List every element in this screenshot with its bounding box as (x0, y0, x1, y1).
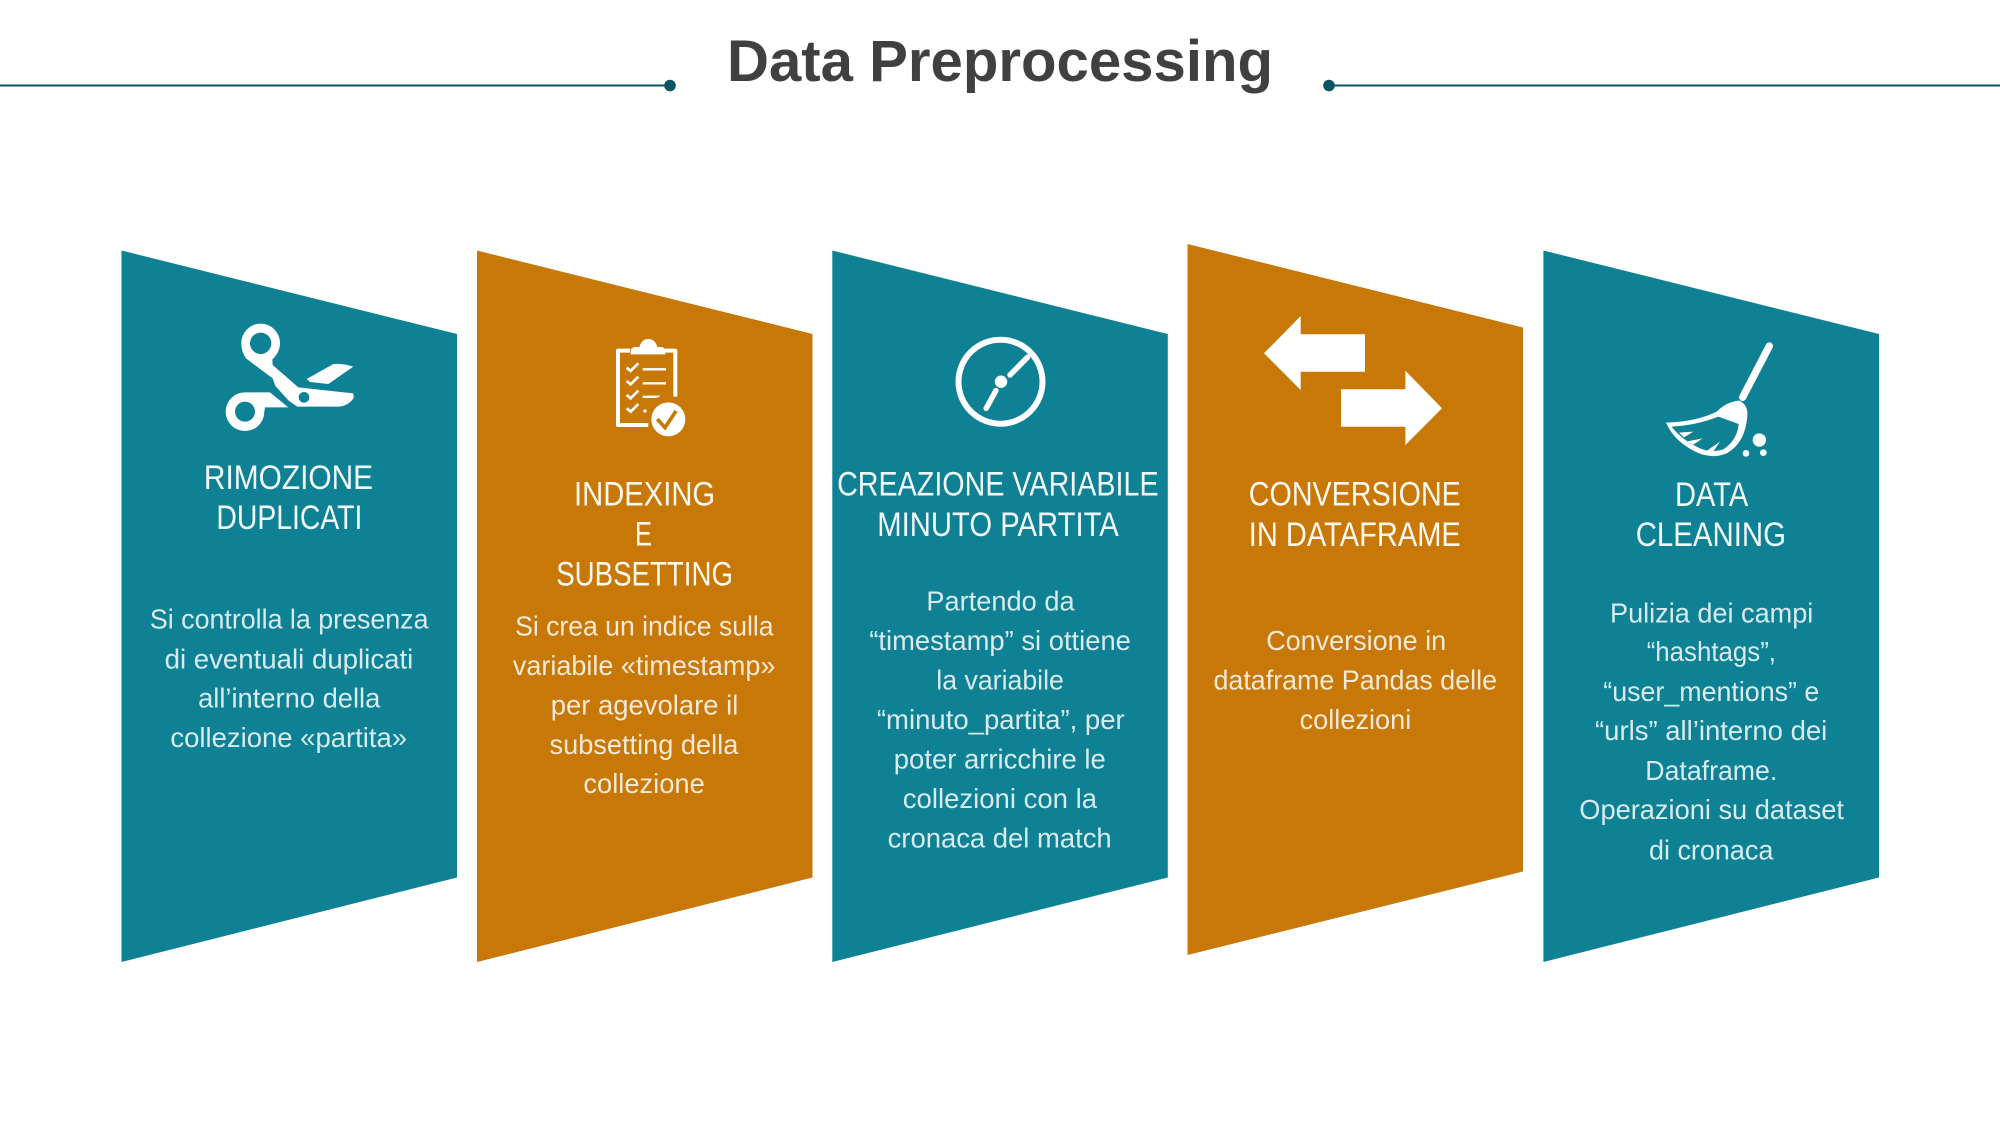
heading (837, 466, 1159, 544)
text block: “minuto_partita”, per (877, 704, 1125, 735)
text block (150, 604, 429, 753)
title rule: right (1323, 80, 2000, 91)
heading: IN DATAFRAME (1249, 516, 1461, 554)
panel: conversione in dataframe (1188, 244, 1523, 955)
heading (556, 476, 733, 594)
text block: Pulizia dei campi (1610, 597, 1813, 628)
text block: subsetting della (550, 729, 739, 760)
title: Data Preprocessing (727, 29, 1273, 94)
heading: CONVERSIONE (1249, 476, 1461, 514)
text block: Si crea un indice sulla (515, 611, 774, 642)
heading: CLEANING (1636, 516, 1786, 554)
icon: broom (1666, 346, 1769, 457)
text block: “timestamp” si ottiene (869, 625, 1131, 656)
heading: E (635, 516, 652, 554)
text block: Si controlla la presenza (150, 604, 429, 634)
text block: collezione (583, 768, 705, 799)
text block: Conversione in (1266, 625, 1446, 656)
text block: variabile «timestamp» (513, 650, 775, 681)
heading: SUBSETTING (556, 556, 733, 594)
text block (1579, 597, 1844, 865)
text block: dataframe Pandas delle (1214, 664, 1497, 695)
text block: all’interno della (198, 682, 381, 714)
panel: creazione variabile minuto partita (832, 250, 1168, 962)
text block: di eventuali duplicati (165, 643, 413, 674)
text block: per agevolare il (551, 689, 738, 720)
heading: CREAZIONE VARIABILE (837, 466, 1159, 504)
text block: “urls” all’interno dei (1595, 715, 1827, 746)
heading: DATA (1675, 476, 1749, 514)
icon: clipboard checklist (618, 339, 688, 439)
text block: la variabile (936, 664, 1064, 695)
heading (204, 459, 373, 537)
text block: “hashtags”, (1647, 636, 1776, 667)
heading (1249, 476, 1461, 554)
heading: RIMOZIONE (204, 459, 373, 497)
panel: indexing e subsetting (477, 250, 812, 962)
text block: collezioni con la (903, 783, 1097, 814)
text block: collezione «partita» (170, 722, 407, 753)
text block: Partendo da (926, 586, 1075, 616)
panel: data cleaning (1543, 250, 1879, 962)
panel: rimozione duplicati (122, 250, 457, 962)
text block: “user_mentions” e (1603, 676, 1819, 707)
icon: scissors (226, 324, 354, 431)
icon: swap arrows (1264, 316, 1442, 445)
heading: DUPLICATI (216, 499, 362, 537)
text block: cronaca del match (888, 822, 1112, 853)
heading: INDEXING (574, 476, 715, 514)
text block (1214, 625, 1497, 735)
heading (1636, 476, 1786, 554)
text block (513, 611, 775, 799)
text block: Dataframe. (1645, 755, 1777, 786)
text block (869, 586, 1131, 853)
icon: gauge (958, 340, 1042, 424)
title rule: left (0, 80, 676, 91)
text block: collezioni (1300, 704, 1411, 735)
text block: poter arricchire le (894, 743, 1106, 774)
heading: MINUTO PARTITA (877, 506, 1119, 544)
text block: Operazioni su dataset (1579, 794, 1844, 825)
text block: di cronaca (1649, 834, 1774, 865)
